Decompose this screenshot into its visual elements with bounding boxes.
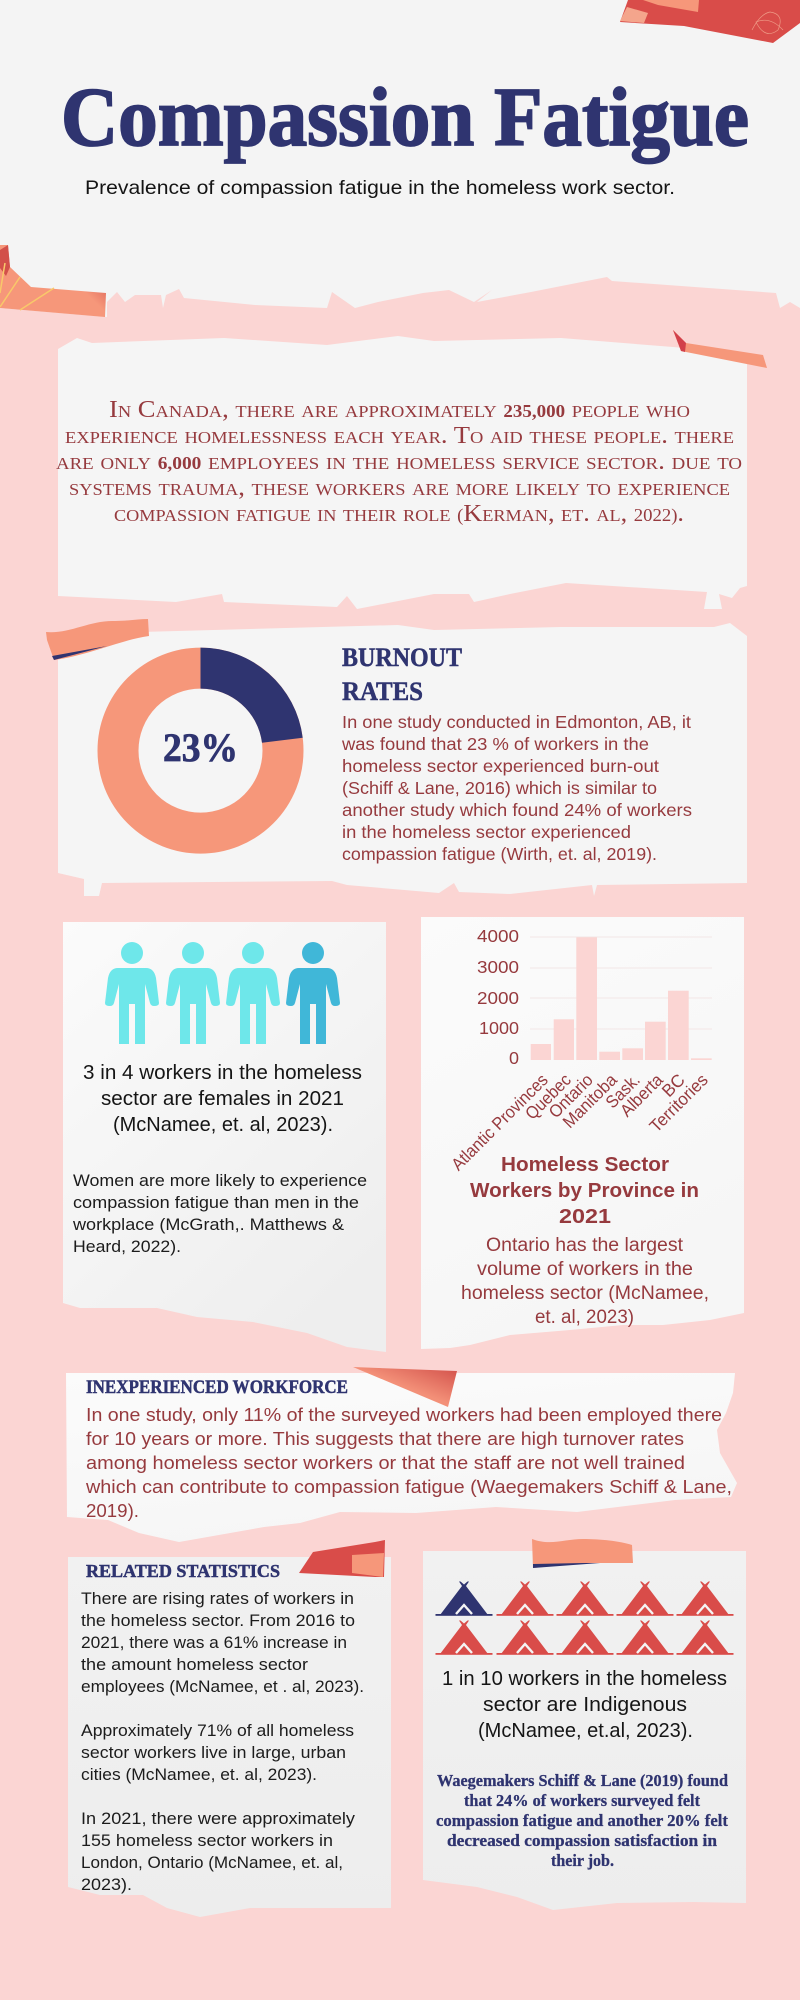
inexperienced text: for 10 years or more. This suggests that there are high turnover rates <box>86 1428 684 1449</box>
panel: burnout rates <box>58 623 747 896</box>
inexperienced text: which can contribute to compassion fatigue (Waegemakers Schiff & Lane, <box>85 1476 732 1497</box>
chart note: Ontario has the largest <box>486 1235 684 1256</box>
burnout text: In one study conducted in Edmonton, AB, it <box>342 712 691 732</box>
related text: In 2021, there were approximately <box>81 1809 356 1828</box>
inexperienced text <box>85 1404 732 1521</box>
tape: inexperienced panel <box>353 1367 457 1407</box>
related text: There are rising rates of workers in <box>81 1589 354 1608</box>
women text: Women are more likely to experience <box>73 1171 367 1190</box>
chart note: homeless sector (McNamee, <box>461 1283 709 1304</box>
inexperienced text: among homeless sector workers or that the staff are not well trained <box>86 1452 685 1473</box>
panel: female workers <box>63 922 386 1352</box>
related text <box>81 1589 364 1894</box>
compassion satisfaction text: compassion fatigue and another 20% felt <box>436 1811 728 1830</box>
related text: the homeless sector. From 2016 to <box>81 1611 355 1630</box>
tape: top right <box>620 0 800 43</box>
women text: workplace (McGrath,. Matthews & <box>72 1215 345 1234</box>
panel: intro <box>56 336 747 609</box>
burnout text: was found that 23 % of workers in the <box>341 734 649 754</box>
panel: workers by province <box>421 917 744 1349</box>
bar chart: Quebec <box>521 1070 575 1123</box>
related text: cities (McNamee, et. al, 2023). <box>81 1765 317 1784</box>
women text: Heard, 2022). <box>73 1237 181 1256</box>
related text: Approximately 71% of all homeless <box>81 1721 354 1740</box>
women text <box>72 1171 367 1256</box>
compassion satisfaction text: decreased compassion satisfaction in <box>447 1831 718 1850</box>
intro text: are only 6,000 employees in the homeless service sector. due to <box>56 448 742 475</box>
compassion satisfaction text: their job. <box>551 1851 614 1870</box>
burnout text: compassion fatigue (Wirth, et. al, 2019). <box>342 844 657 864</box>
burnout heading: BURNOUT <box>342 643 462 672</box>
bar chart: 0 <box>509 1048 519 1068</box>
related heading: RELATED STATISTICS <box>86 1561 280 1581</box>
indigenous stat text: (McNamee, et.al, 2023). <box>478 1720 693 1742</box>
chart note: volume of workers in the <box>477 1259 693 1280</box>
icon: ten tents <box>436 1582 734 1655</box>
tape: related statistics <box>299 1540 385 1577</box>
related text: 2023). <box>81 1875 132 1894</box>
indigenous stat text: 1 in 10 workers in the homeless <box>442 1668 727 1690</box>
tape: indigenous panel <box>532 1539 633 1568</box>
intro text: In Canada, there are approximately 235,000 people who <box>109 396 690 423</box>
chart heading <box>470 1154 699 1228</box>
tape: left <box>0 245 106 317</box>
indigenous stat text <box>442 1668 727 1742</box>
bar chart: 4000 <box>477 926 519 946</box>
chart note <box>461 1235 709 1328</box>
burnout heading: RATES <box>342 677 423 706</box>
chart heading: 2021 <box>559 1206 611 1228</box>
icon: four people <box>105 942 340 1044</box>
related text: London, Ontario (McNamee, et. al, <box>81 1853 343 1872</box>
compassion satisfaction text: Waegemakers Schiff & Lane (2019) found <box>437 1771 729 1790</box>
panel: related statistics <box>68 1557 391 1917</box>
burnout heading <box>342 643 462 706</box>
bar chart: Alberta <box>616 1070 667 1121</box>
donut chart <box>118 648 303 833</box>
female stat text: (McNamee, et. al, 2023). <box>113 1114 333 1136</box>
female stat text <box>83 1062 362 1136</box>
inexperienced heading: INEXPERIENCED WORKFORCE <box>86 1377 348 1398</box>
burnout text: homeless sector experienced burn-out <box>342 756 659 776</box>
chart heading: Homeless Sector <box>501 1154 669 1176</box>
panel: indigenous workers <box>423 1551 746 1910</box>
intro text <box>56 396 742 527</box>
bar chart: Ontario <box>545 1070 597 1122</box>
bar chart: 3000 <box>477 957 519 977</box>
header panel <box>0 0 800 317</box>
intro text: compassion fatigue in their role (Kerman, et. al, 2022). <box>114 500 684 527</box>
female stat text: 3 in 4 workers in the homeless <box>83 1062 362 1084</box>
related text: sector workers live in large, urban <box>81 1743 346 1762</box>
bar chart: BC <box>658 1070 689 1101</box>
panel: inexperienced workforce <box>66 1373 737 1542</box>
related text: 2021, there was a 61% increase in <box>81 1633 347 1652</box>
related text: the amount homeless sector <box>81 1655 308 1674</box>
bar chart: Territories <box>645 1070 712 1136</box>
related text: 155 homeless sector workers in <box>81 1831 333 1850</box>
inexperienced text: 2019). <box>86 1500 139 1521</box>
burnout text: another study which found 24% of workers <box>342 800 692 820</box>
bar chart <box>447 926 712 1174</box>
tape: burnout panel <box>46 619 149 660</box>
burnout text <box>341 712 692 864</box>
bar chart: Manitoba <box>559 1070 621 1132</box>
donut value: 23% <box>163 725 238 770</box>
chart note: et. al, 2023) <box>535 1307 634 1328</box>
bar chart: Sask. <box>601 1070 644 1112</box>
bar chart: Atlantic Provinces <box>447 1070 552 1174</box>
chart heading: Workers by Province in <box>470 1180 699 1202</box>
female stat text: sector are females in 2021 <box>101 1088 344 1110</box>
compassion satisfaction text: that 24% of workers surveyed felt <box>464 1791 700 1810</box>
inexperienced text: In one study, only 11% of the surveyed workers had been employed there <box>86 1404 722 1425</box>
compassion satisfaction text <box>436 1771 729 1870</box>
tape: intro panel <box>673 330 767 368</box>
related text: employees (McNamee, et . al, 2023). <box>81 1677 364 1696</box>
burnout text: in the homeless sector experienced <box>342 822 631 842</box>
women text: compassion fatigue than men in the <box>73 1193 359 1212</box>
bar chart: 1000 <box>479 1018 519 1038</box>
bar chart: 2000 <box>477 988 519 1008</box>
burnout text: (Schiff & Lane, 2016) which is similar to <box>342 778 657 798</box>
subtitle: Prevalence of compassion fatigue in the homeless work sector. <box>85 177 675 199</box>
indigenous stat text: sector are Indigenous <box>483 1694 687 1716</box>
title: Compassion Fatigue <box>61 71 749 164</box>
intro text: experience homelessness each year. To aid these people. there <box>65 422 734 449</box>
intro text: systems trauma, these workers are more likely to experience <box>69 474 730 501</box>
